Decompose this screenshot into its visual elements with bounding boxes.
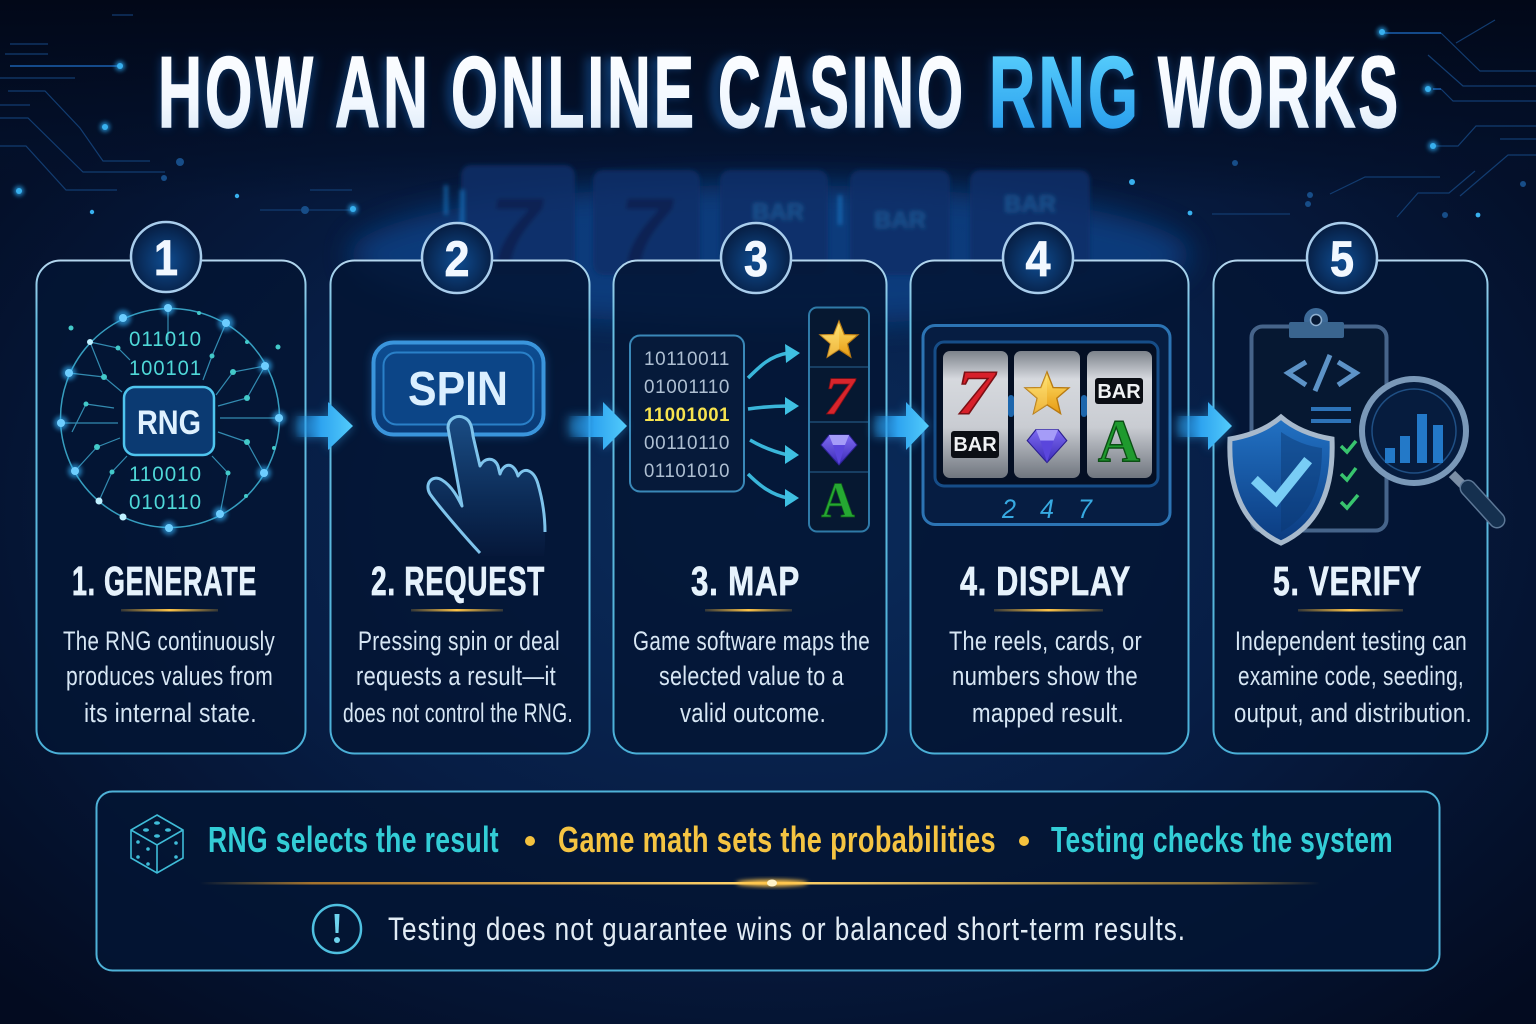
icon: spin button with pointing hand xyxy=(372,341,545,556)
panel: summary xyxy=(96,792,1440,970)
title: ONLINE xyxy=(451,37,697,149)
heading underline xyxy=(994,609,1103,612)
icon: magnifier with bar chart xyxy=(1362,379,1497,520)
heading: 1. Generate: 1. GENERATE xyxy=(72,558,257,604)
text: step 1 description: The RNG continuously xyxy=(63,626,275,656)
panel: step 5 verify xyxy=(1214,223,1497,754)
background: ghost slot machine: 7 xyxy=(619,180,674,282)
heading: 5. Verify: 5. VERIFY xyxy=(1273,558,1422,604)
text: disclaimer: Testing does not guarantee wins or balanced short-term results. xyxy=(388,911,1186,947)
icon: binary list xyxy=(630,336,744,492)
icon: spin button with pointing hand: SPIN xyxy=(408,363,508,416)
arrow: step 1 to 2 xyxy=(295,402,353,450)
panel: step 1 generate xyxy=(36,222,306,754)
icon: slot machine: 2 xyxy=(1001,494,1016,524)
icon: binary list: 11001001 xyxy=(644,405,730,426)
step number 5 xyxy=(1307,223,1377,293)
text: step 4 description: mapped result. xyxy=(972,698,1124,728)
heading: 4. Display: 4. DISPLAY xyxy=(960,558,1131,604)
icon: slot machine: A xyxy=(1098,408,1140,474)
text: step 5 description xyxy=(1234,626,1472,728)
text: step 4 description xyxy=(949,626,1142,728)
text: step 2 description: Pressing spin or deal xyxy=(358,626,560,656)
icon: RNG network globe: 110010 xyxy=(129,463,202,486)
heading: 3. Map: 3. MAP xyxy=(691,558,800,604)
text: step 5 description: examine code, seeding, xyxy=(1238,661,1464,691)
text: step 3 description: valid outcome. xyxy=(680,698,826,728)
text: step 5 description: output, and distribution. xyxy=(1234,698,1472,728)
text: step 1 description: produces values from xyxy=(66,661,273,691)
divider with glow xyxy=(200,880,1320,886)
heading underline xyxy=(705,609,792,612)
text: step 2 description: requests a result—it xyxy=(356,661,556,691)
icon: symbol column xyxy=(809,308,869,532)
step number 1 xyxy=(131,222,201,292)
icon: slot machine: BAR xyxy=(953,434,997,456)
background: ghost slot machine: BAR xyxy=(752,199,804,226)
icon: binary list: 01001110 xyxy=(644,377,730,398)
icon: shield with check xyxy=(1230,417,1332,543)
background: circuit pattern and particles xyxy=(0,15,1536,218)
text: step 2 description xyxy=(343,626,573,728)
title: CASINO xyxy=(718,37,966,149)
icon: RNG network globe xyxy=(54,301,286,535)
background: ghost slot machine: 7 xyxy=(489,180,544,282)
heading underline xyxy=(411,609,503,612)
text: step 4 description: numbers show the xyxy=(952,661,1138,691)
background: ghost slot machine: BAR xyxy=(874,207,926,234)
heading underline xyxy=(1298,609,1403,612)
icon: RNG network globe: 011010 xyxy=(129,328,202,351)
icon: warning xyxy=(313,905,361,953)
text: step 4 description: The reels, cards, or xyxy=(949,626,1142,656)
arrow: step 2 to 3 xyxy=(568,402,627,450)
text: step 3 description: selected value to a xyxy=(659,661,844,691)
icon: symbol column: 7 xyxy=(824,366,856,426)
background: ghost slot machine: BAR xyxy=(1004,191,1056,218)
icon: slot machine: 7 xyxy=(956,358,997,428)
icon: binary list: 00110110 xyxy=(644,433,730,454)
heading underline xyxy=(121,609,218,612)
text: step 1 description xyxy=(63,626,275,728)
bullet xyxy=(1019,836,1029,846)
panel: step 3 map xyxy=(614,223,886,754)
icon: RNG network globe: RNG xyxy=(137,404,201,442)
background: ghost slot machine xyxy=(350,165,1190,325)
title: WORKS xyxy=(1158,37,1397,149)
icon: binary list: 10110011 xyxy=(644,349,730,370)
icon: slot machine: 7 xyxy=(1078,494,1093,524)
step number 3: 3 xyxy=(744,231,768,287)
text: game math sets the probabilities: Game math sets the probabilities xyxy=(558,819,996,860)
text: testing checks the system: Testing checks the system xyxy=(1051,819,1393,860)
title: RNG xyxy=(989,37,1141,149)
icon: RNG network globe: 010110 xyxy=(129,491,202,514)
panel: step 2 request xyxy=(330,223,590,754)
icon: slot machine xyxy=(923,326,1170,524)
step number 4 xyxy=(1003,223,1073,293)
arrows: value to symbol xyxy=(748,344,800,507)
text: step 1 description: its internal state. xyxy=(84,698,257,728)
panel: step 4 display xyxy=(910,223,1188,754)
bullet xyxy=(525,836,535,846)
icon: RNG network globe: 100101 xyxy=(129,357,202,380)
title: AN xyxy=(335,37,431,149)
text: step 3 description xyxy=(633,626,870,728)
text: RNG selects the result: RNG selects the result xyxy=(208,819,499,860)
title: HOW xyxy=(158,37,316,149)
icon: binary list: 01101010 xyxy=(644,461,730,482)
icon: slot machine: 4 xyxy=(1040,494,1054,524)
icon: dice xyxy=(131,815,183,873)
title: HOW AN ONLINE CASINO xyxy=(157,37,962,149)
background: top darkening xyxy=(0,0,1536,200)
icon: slot machine: BAR xyxy=(1097,381,1141,403)
icon: clipboard with code xyxy=(1252,308,1386,530)
text: step 5 description: Independent testing can xyxy=(1235,626,1467,656)
icon: symbol column: A xyxy=(821,473,855,529)
step number 1: 1 xyxy=(154,230,178,286)
step number 4: 4 xyxy=(1026,231,1051,287)
text: step 3 description: Game software maps the xyxy=(633,626,870,656)
arrow: step 3 to 4 xyxy=(873,402,929,450)
text: step 2 description: does not control the RNG. xyxy=(343,698,573,728)
heading: 2. Request: 2. REQUEST xyxy=(371,558,545,604)
step number 3 xyxy=(721,223,791,293)
title: RNG xyxy=(988,37,1137,149)
step number 2: 2 xyxy=(444,231,470,287)
step number 2 xyxy=(422,223,492,293)
arrow: step 4 to 5 xyxy=(1176,402,1232,450)
step number 5: 5 xyxy=(1330,231,1354,287)
